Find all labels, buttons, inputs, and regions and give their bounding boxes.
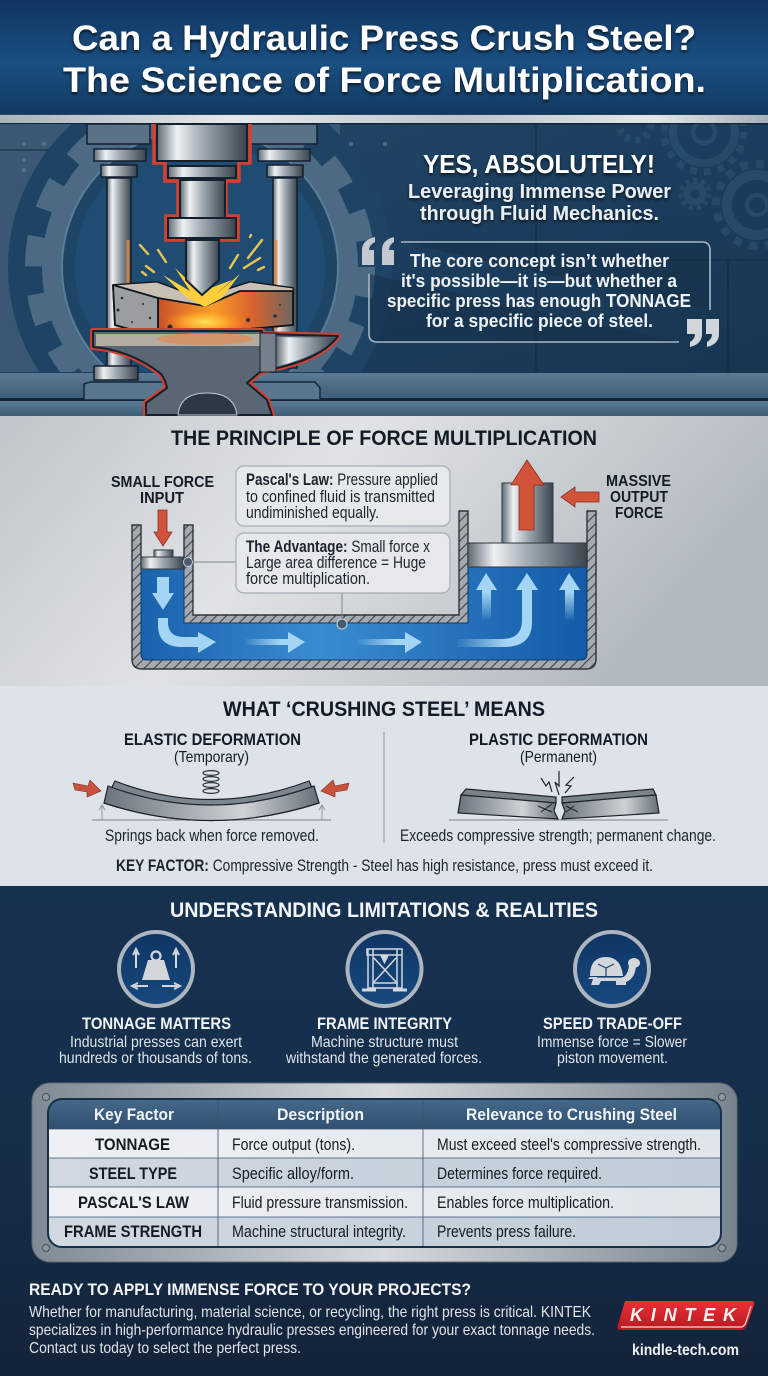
hydraulic press illustration (87, 124, 338, 415)
small piston (141, 550, 184, 569)
quote box (362, 237, 719, 347)
opening quote mark (362, 237, 394, 265)
elastic bar illustration (73, 771, 349, 820)
item: speed trade-off: Immense force = Slower (537, 1034, 688, 1051)
row: pascal's law (78, 1194, 614, 1212)
icon: tonnage weight (119, 932, 193, 1006)
item: frame integrity: withstand the generated forces. (285, 1050, 482, 1067)
red arrow: input force (154, 510, 172, 546)
background gears (8, 75, 768, 459)
elastic deformation heading: (Temporary) (174, 749, 249, 766)
callout: Pascal's law: to confined fluid is transmitted (246, 488, 435, 506)
item: tonnage matters: hundreds or thousands of tons. (59, 1050, 252, 1067)
item: speed trade-off (537, 1015, 688, 1067)
steel block with glowing dent (113, 282, 293, 337)
press frame (87, 124, 317, 380)
item: tonnage matters: Industrial presses can exert (70, 1034, 242, 1051)
label: massive output force: MASSIVE (606, 473, 671, 490)
hydraulic vessel diagram (132, 460, 599, 669)
icon: turtle (575, 932, 649, 1006)
website: kindle-tech.com (632, 1342, 739, 1359)
answer headline: YES, ABSOLUTELY! (423, 149, 655, 179)
elastic deformation heading: ELASTIC DEFORMATION (124, 731, 301, 749)
vessel walls (132, 511, 596, 669)
logo: KINTEK: KINTEK (630, 1305, 738, 1325)
panel: what crushing steel means (0, 686, 768, 886)
hero panel: press and answer (0, 114, 768, 416)
heading: THE PRINCIPLE OF FORCE MULTIPLICATION (171, 427, 597, 450)
anvil (93, 331, 338, 415)
table plate (32, 1083, 737, 1262)
row: tonnage: Must exceed steel's compressive strength. (437, 1136, 701, 1154)
row: frame strength: Machine structural integrity. (232, 1223, 406, 1241)
row: steel type: Determines force required. (437, 1165, 602, 1183)
quote text: The core concept isn’t whether (410, 251, 669, 271)
row: frame strength: FRAME STRENGTH (64, 1223, 202, 1241)
quote text: specific press has enough TONNAGE (387, 291, 691, 311)
callout: the advantage: force multiplication. (246, 570, 370, 588)
elastic deformation heading (124, 731, 301, 766)
key factor: KEY FACTOR: Compressive Strength - Steel has high resistance, press must exceed it. (116, 857, 653, 875)
callout: the advantage: The Advantage: Small force x (246, 538, 431, 556)
row: tonnage: Force output (tons). (232, 1136, 355, 1154)
call to action body: specializes in high-performance hydraulic presses engineered for your exact tonnage needs. (29, 1322, 595, 1339)
row: pascal's law: PASCAL'S LAW (78, 1194, 189, 1212)
item: speed trade-off: piston movement. (557, 1050, 668, 1067)
hydraulic fluid (141, 567, 587, 660)
heading: WHAT ‘CRUSHING STEEL’ MEANS (223, 698, 545, 721)
heading: UNDERSTANDING LIMITATIONS & REALITIES (170, 899, 598, 922)
item: speed trade-off: SPEED TRADE-OFF (543, 1015, 682, 1033)
label: small force input: INPUT (140, 490, 185, 507)
callout: the advantage (236, 533, 450, 593)
row: steel type (89, 1165, 602, 1183)
callout: the advantage: Large area difference = Huge (246, 554, 426, 572)
item: frame integrity: FRAME INTEGRITY (317, 1015, 452, 1033)
label: massive output force: FORCE (615, 505, 663, 522)
row: tonnage: TONNAGE (95, 1136, 170, 1154)
connector lines (184, 558, 347, 629)
item: frame integrity: Machine structure must (311, 1034, 458, 1051)
callout: Pascal's law: Pascal's Law: Pressure applied (246, 471, 438, 489)
row: steel type: Specific alloy/form. (232, 1165, 354, 1183)
icon: press frame (348, 932, 422, 1006)
plastic deformation heading: PLASTIC DEFORMATION (469, 731, 648, 749)
red arrow: output label pointer (561, 487, 599, 507)
table header: Relevance to Crushing Steel (466, 1105, 677, 1124)
plastic deformation heading (469, 731, 648, 766)
row: pascal's law: Fluid pressure transmission. (232, 1194, 408, 1212)
steel speckles (116, 297, 281, 330)
label: small force input (111, 474, 214, 507)
closing quote mark (687, 319, 719, 347)
call to action body: Contact us today to select the perfect press. (29, 1340, 301, 1357)
answer headline: Leveraging Immense Power (408, 181, 671, 203)
plate screws (42, 1094, 726, 1252)
row: frame strength (64, 1223, 576, 1241)
table header: Description (277, 1105, 364, 1124)
answer headline: through Fluid Mechanics. (420, 203, 659, 225)
panel: limitations and realities (32, 899, 737, 1262)
item: tonnage matters: TONNAGE MATTERS (82, 1015, 231, 1033)
callout: Pascal's law: undiminished equally. (246, 504, 379, 522)
quote text: for a specific piece of steel. (426, 311, 653, 331)
comparison table (48, 1099, 721, 1247)
label: massive output force (606, 473, 671, 522)
logo: KINTEK (617, 1301, 754, 1330)
call to action body: Whether for manufacturing, material science, or recycling, the right press is critical. KINTEK (29, 1304, 591, 1321)
answer headline (408, 149, 671, 225)
label: small force input: SMALL FORCE (111, 474, 214, 491)
table header (94, 1105, 677, 1124)
quote text (387, 251, 691, 331)
row: pascal's law: Enables force multiplication. (437, 1194, 614, 1212)
sparks (140, 235, 264, 275)
item: frame integrity (285, 1015, 482, 1067)
label: massive output force: OUTPUT (610, 489, 668, 506)
red arrow: output force (511, 460, 544, 530)
page background: dark lower section (0, 886, 768, 1376)
table header: Key Factor (94, 1105, 174, 1124)
header banner (0, 0, 768, 114)
quote text: it's possible—it is—but whether a (401, 271, 678, 291)
base bands (0, 373, 768, 416)
call to action body (29, 1304, 595, 1357)
call to action heading: READY TO APPLY IMMENSE FORCE TO YOUR PROJECTS? (29, 1281, 471, 1299)
panel: force multiplication (0, 416, 768, 686)
item: tonnage matters (59, 1015, 252, 1067)
row: steel type: STEEL TYPE (89, 1165, 177, 1183)
elastic caption: Springs back when force removed. (105, 827, 319, 845)
callout: Pascal's law (236, 466, 450, 526)
title: Can a Hydraulic Press Crush Steel? (72, 19, 696, 58)
ram and punch (154, 124, 250, 295)
footer (29, 1281, 754, 1359)
plastic deformation heading: (Permanent) (520, 749, 597, 766)
title (63, 19, 706, 100)
large piston (468, 483, 587, 567)
title: The Science of Force Multiplication. (63, 61, 706, 100)
row: tonnage (95, 1136, 701, 1154)
plastic caption: Exceeds compressive strength; permanent change. (400, 827, 716, 845)
impact flash (163, 268, 240, 307)
flow arrows (152, 573, 580, 653)
row: frame strength: Prevents press failure. (437, 1223, 576, 1241)
plastic bar illustration (449, 771, 668, 820)
